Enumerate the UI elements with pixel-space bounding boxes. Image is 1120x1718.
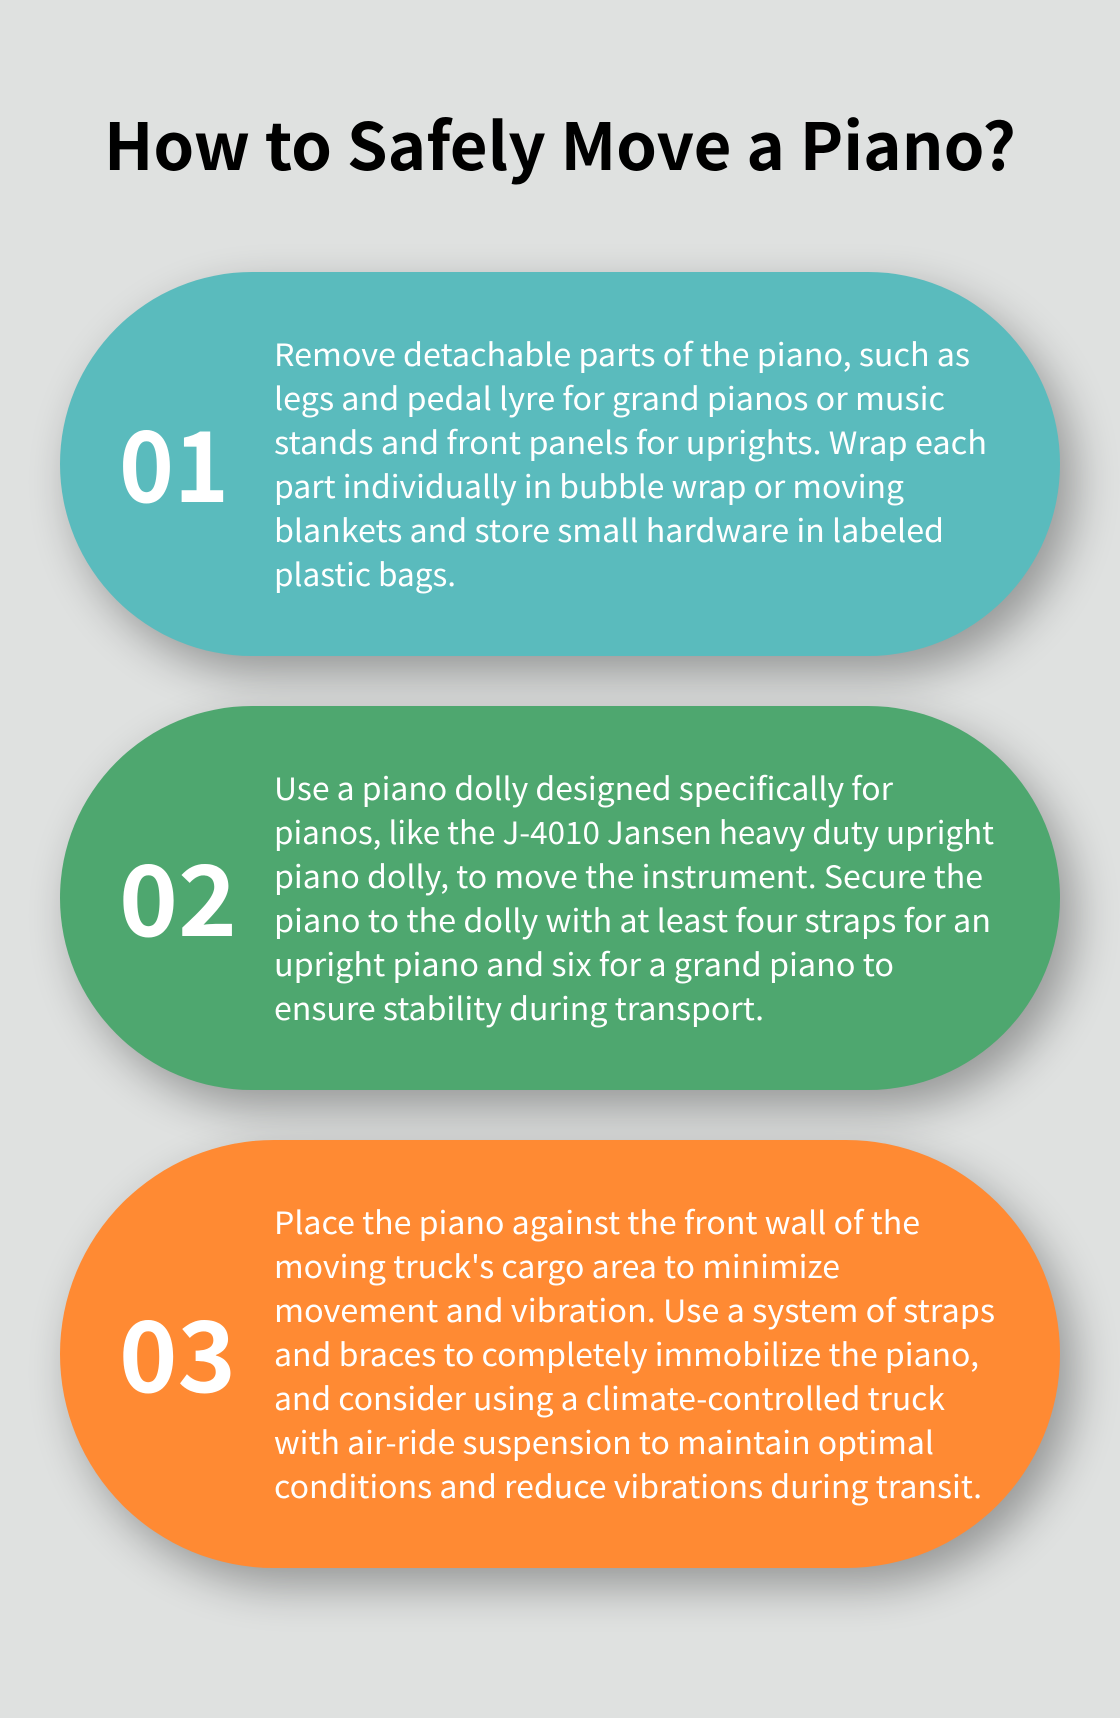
panel: step 03 (60, 1140, 1060, 1568)
text block: step 03 description: moving truck's cargo area to minimize (274, 1242, 840, 1287)
text block: step 01 description: Remove detachable parts of the piano, such as (274, 330, 970, 375)
number: 01: 01 (119, 389, 229, 531)
text block: step 02 description: upright piano and six for a grand piano to (274, 940, 894, 985)
text block: step 02 description: ensure stability during transport. (274, 984, 764, 1029)
text block: step 02 description: Use a piano dolly designed specifically for (274, 764, 894, 809)
text block: step 03 description: with air-ride suspension to maintain optimal (274, 1418, 934, 1463)
text block: step 02 description: piano to the dolly with at least four straps for an (274, 896, 991, 941)
text block: step 02 description: pianos, like the J-4010 Jansen heavy duty upright (274, 808, 994, 853)
text block: step 01 description: part individually in bubble wrap or moving (274, 462, 905, 507)
text block: step 02 description: piano dolly, to move the instrument. Secure the (274, 852, 983, 897)
panel: step 02 (60, 706, 1060, 1090)
text block: step 01 description: plastic bags. (274, 550, 456, 595)
text block: step 01 description (274, 330, 987, 595)
text block: step 03 description: and consider using a climate-controlled truck (274, 1374, 945, 1419)
text block: step 01 description: stands and front panels for uprights. Wrap each (274, 418, 987, 463)
number: 02: 02 (119, 823, 237, 965)
text block: step 03 description (274, 1198, 995, 1507)
text block: step 02 description (274, 764, 994, 1029)
text block: step 03 description: conditions and reduce vibrations during transit. (274, 1462, 982, 1507)
text block: step 01 description: blankets and store small hardware in labeled (274, 506, 944, 551)
text block: step 03 description: movement and vibration. Use a system of straps (274, 1286, 995, 1331)
text block: step 01 description: legs and pedal lyre for grand pianos or music (274, 374, 945, 419)
panel: step 01 (60, 272, 1060, 656)
text block: step 03 description: and braces to completely immobilize the piano, (274, 1330, 979, 1375)
number: 03: 03 (119, 1279, 236, 1421)
text block: step 03 description: Place the piano against the front wall of the (274, 1198, 920, 1243)
